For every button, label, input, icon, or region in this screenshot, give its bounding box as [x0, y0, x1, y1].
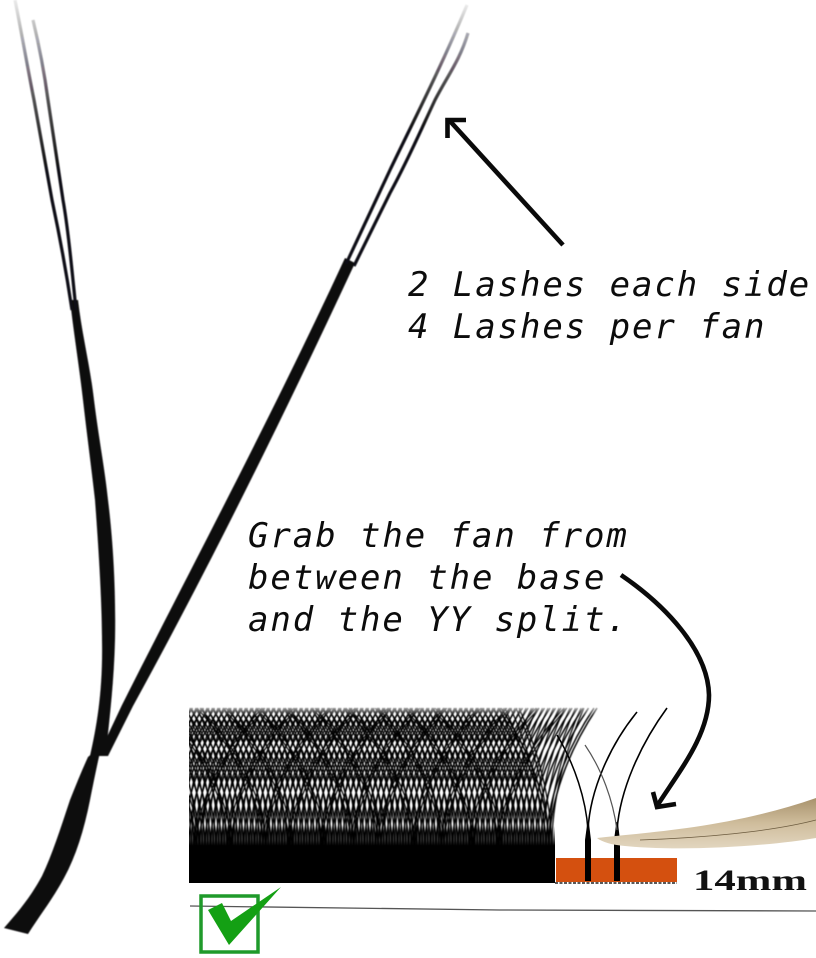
- caption: grab instruction: Grab the fan from: [248, 516, 629, 556]
- curved arrow pointing to tweezers: [621, 575, 709, 807]
- right lash branch: [98, 258, 355, 756]
- arrow pointing to lash tips: [448, 120, 563, 245]
- dashed strip edge: [555, 882, 677, 884]
- baseline rule: [190, 906, 816, 911]
- left lash tips: [15, 0, 76, 310]
- caption: grab instruction: and the YY split.: [248, 600, 629, 640]
- right lash tips: [346, 5, 468, 266]
- caption: lash count: 2 Lashes each side: [408, 265, 811, 305]
- lash tray: [189, 707, 677, 884]
- caption: grab instruction: between the base: [248, 558, 606, 598]
- two separated fans: [557, 708, 667, 881]
- caption: lash count: 4 Lashes per fan: [408, 307, 766, 347]
- orange strip: [556, 858, 677, 882]
- large YY lash fan: [4, 0, 468, 934]
- left lash branch: [70, 300, 115, 756]
- caption: grab instruction: [248, 516, 629, 640]
- black lash base: [189, 826, 555, 854]
- size label: 14mm: [693, 864, 807, 897]
- lash tip fade: [185, 704, 610, 716]
- lash base: [4, 752, 100, 934]
- icon: green check box: [201, 887, 281, 952]
- caption: lash count: [408, 265, 811, 347]
- lash strip fans: [189, 707, 598, 845]
- tweezers: [597, 798, 816, 848]
